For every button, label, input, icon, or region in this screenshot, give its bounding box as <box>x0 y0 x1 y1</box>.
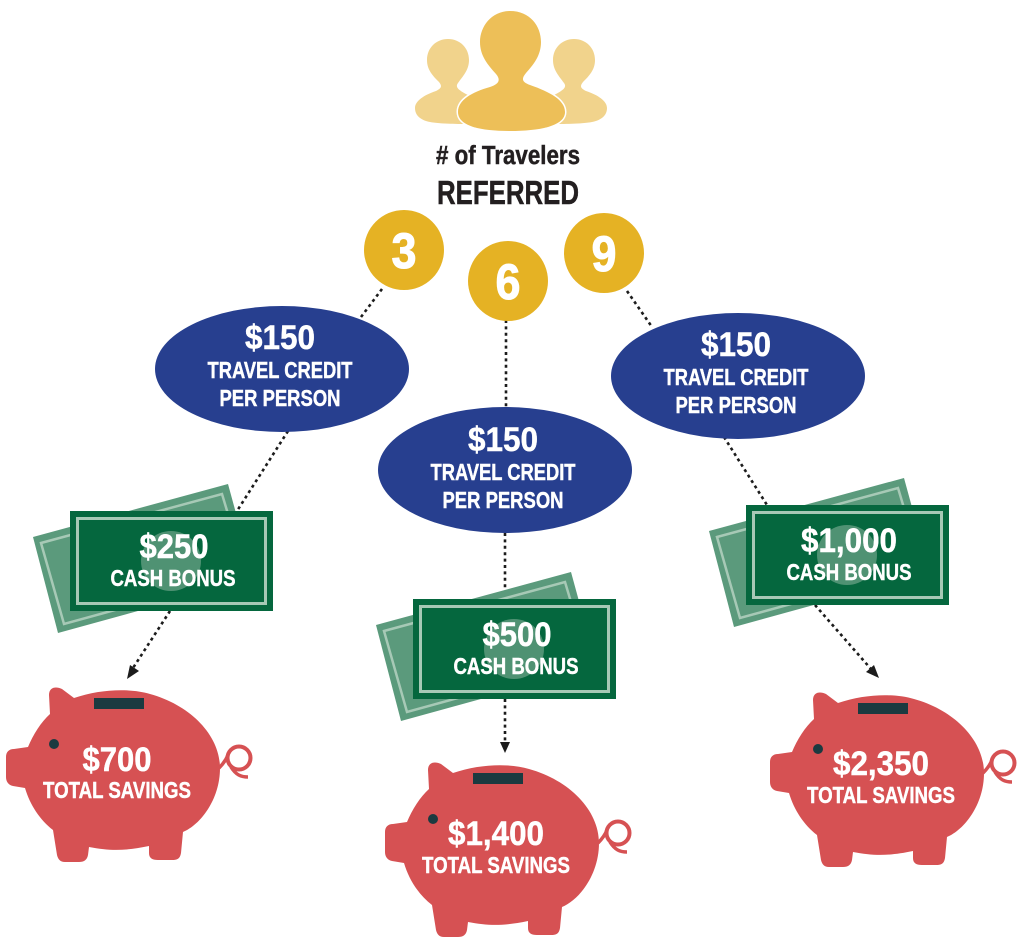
panel: left cash bonus <box>33 484 273 633</box>
panel: center piggy bank: TOTAL SAVINGS <box>422 852 570 878</box>
panel: right travel credit: PER PERSON <box>676 392 796 418</box>
icon: left traveler <box>415 39 470 124</box>
heading: REFERRED: REFERRED <box>437 174 579 211</box>
panel: center cash bonus <box>376 572 616 721</box>
panel: right cash bonus <box>709 478 949 627</box>
icon: center traveler <box>458 11 565 131</box>
panel: right travel credit: TRAVEL CREDIT <box>664 364 809 390</box>
badge: 6 travelers: 6 <box>496 254 520 310</box>
panel: right piggy bank <box>770 692 1014 867</box>
panel: right piggy bank: TOTAL SAVINGS <box>807 782 955 808</box>
badge: 9 travelers <box>564 213 644 293</box>
panel: left cash bonus: CASH BONUS <box>110 565 236 591</box>
icon: right traveler <box>552 39 607 124</box>
panel: left travel credit: PER PERSON <box>220 385 340 411</box>
panel: left travel credit: $150 <box>245 319 315 357</box>
panel: right travel credit: $150 <box>701 326 771 364</box>
panel: left piggy bank <box>6 687 250 862</box>
panel: right piggy bank: $2,350 <box>833 745 929 783</box>
panel: right cash bonus: $1,000 <box>801 522 897 560</box>
arrow: left to pig <box>127 665 139 679</box>
panel: center cash bonus: CASH BONUS <box>454 653 578 679</box>
panel: right travel credit <box>611 313 865 439</box>
badge: 3 travelers: 3 <box>392 223 416 279</box>
heading: # of Travelers: # of Travelers <box>436 142 580 170</box>
badge: 3 travelers <box>364 210 444 290</box>
panel: left travel credit: TRAVEL CREDIT <box>208 357 353 383</box>
panel: center piggy bank <box>385 762 630 937</box>
panel: center travel credit: TRAVEL CREDIT <box>430 459 576 485</box>
panel: center travel credit <box>378 407 632 533</box>
panel: center piggy bank: $1,400 <box>448 815 544 853</box>
icon: travelers group <box>415 11 607 131</box>
panel: left cash bonus: $250 <box>140 528 208 566</box>
panel: center travel credit: $150 <box>468 421 538 459</box>
arrow: right to pig <box>866 665 879 678</box>
panel: left piggy bank: TOTAL SAVINGS <box>43 777 191 803</box>
badge: 6 travelers <box>468 241 548 321</box>
panel: left travel credit <box>155 306 409 432</box>
panel: center travel credit: PER PERSON <box>442 487 564 513</box>
arrow: center to pig <box>500 742 510 753</box>
panel: left piggy bank: $700 <box>82 741 152 779</box>
panel: right cash bonus: CASH BONUS <box>786 559 912 585</box>
connector lines <box>133 289 871 744</box>
badge: 9 travelers: 9 <box>592 226 616 282</box>
panel: center cash bonus: $500 <box>482 616 552 654</box>
